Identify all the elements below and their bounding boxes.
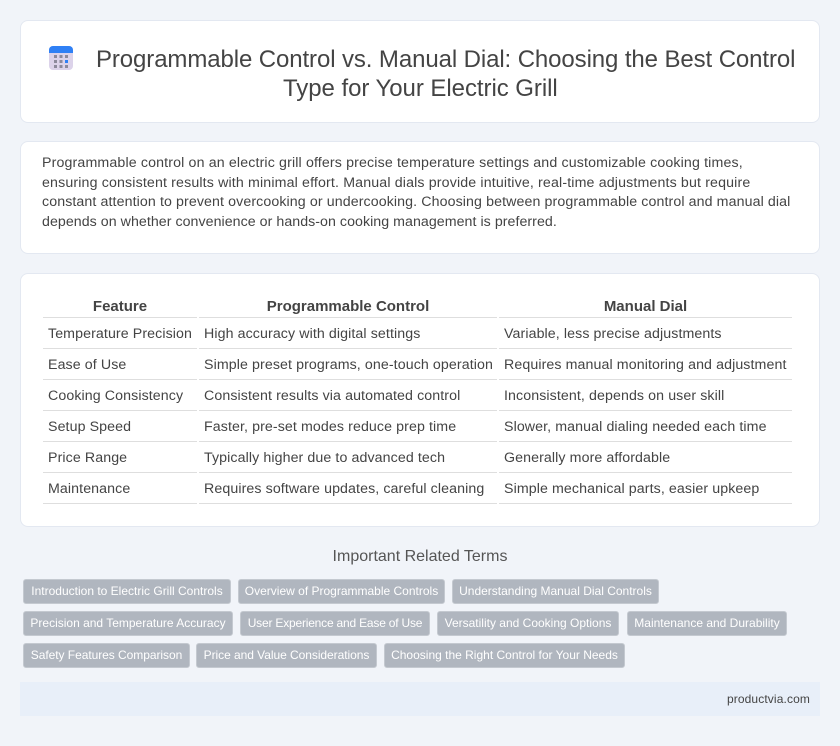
table rows: Simple mechanical parts, easier upkeep bbox=[504, 481, 759, 497]
table rows bbox=[43, 317, 792, 504]
tags: related terms: Versatility and Cooking Options bbox=[445, 616, 611, 630]
tags: related terms: Price and Value Considerations bbox=[204, 648, 369, 662]
table rows: Simple preset programs, one-touch operation bbox=[204, 357, 493, 373]
table rows: Inconsistent, depends on user skill bbox=[504, 388, 724, 404]
table headers bbox=[93, 298, 687, 315]
table rows: Temperature Precision bbox=[48, 326, 192, 342]
footer bar bbox=[20, 682, 820, 716]
tags: related terms: Understanding Manual Dial Controls bbox=[459, 584, 652, 598]
intro text: constant attention to prevent overcooking or undercooking. Choosing between programmable control and manual dial bbox=[42, 194, 790, 210]
intro text: Programmable control on an electric grill offers precise temperature settings and customizable cooking times, bbox=[42, 155, 743, 171]
table rows: Slower, manual dialing needed each time bbox=[504, 419, 767, 435]
intro text: depends on whether convenience or hands-on cooking management is preferred. bbox=[42, 214, 557, 230]
tags: related terms: Precision and Temperature Accuracy bbox=[30, 616, 226, 630]
related terms heading: Important Related Terms bbox=[333, 548, 507, 565]
title: Type for Your Electric Grill bbox=[283, 75, 558, 102]
intro text bbox=[42, 155, 790, 230]
table rows: Typically higher due to advanced tech bbox=[204, 450, 445, 466]
footer brand: productvia.com bbox=[727, 692, 810, 706]
table rows: Requires software updates, careful cleaning bbox=[204, 481, 484, 497]
icon: calendar bbox=[49, 46, 73, 70]
table rows: Setup Speed bbox=[48, 419, 131, 435]
tags: related terms: User Experience and Ease of Use bbox=[248, 616, 422, 630]
panel: comparison table bbox=[20, 273, 820, 527]
title bbox=[96, 46, 795, 102]
table headers: Feature bbox=[93, 298, 147, 315]
table rows: Maintenance bbox=[48, 481, 130, 497]
intro text: ensuring consistent results with minimal effort. Manual dials provide intuitive, real-time adjustments but require bbox=[42, 174, 750, 190]
table rows: Variable, less precise adjustments bbox=[504, 326, 722, 342]
table headers: Manual Dial bbox=[604, 298, 687, 315]
tags: related terms: Choosing the Right Control for Your Needs bbox=[391, 648, 618, 662]
tags: related terms: Maintenance and Durability bbox=[634, 616, 780, 630]
tags: related terms: Introduction to Electric Grill Controls bbox=[31, 584, 223, 598]
table rows: Requires manual monitoring and adjustment bbox=[504, 357, 786, 373]
tags: related terms: Safety Features Comparison bbox=[31, 648, 182, 662]
table rows: High accuracy with digital settings bbox=[204, 326, 420, 342]
panel: intro bbox=[20, 141, 820, 254]
title: Programmable Control vs. Manual Dial: Choosing the Best Control bbox=[96, 46, 795, 73]
tags: related terms: Overview of Programmable Controls bbox=[245, 584, 438, 598]
table headers: Programmable Control bbox=[267, 298, 429, 315]
header card bbox=[20, 20, 820, 123]
table rows: Faster, pre-set modes reduce prep time bbox=[204, 419, 456, 435]
table rows: Ease of Use bbox=[48, 357, 126, 373]
table rows: Price Range bbox=[48, 450, 127, 466]
table rows: Generally more affordable bbox=[504, 450, 670, 466]
tags: related terms bbox=[23, 579, 787, 668]
table rows: Cooking Consistency bbox=[48, 388, 183, 404]
table rows: Consistent results via automated control bbox=[204, 388, 460, 404]
